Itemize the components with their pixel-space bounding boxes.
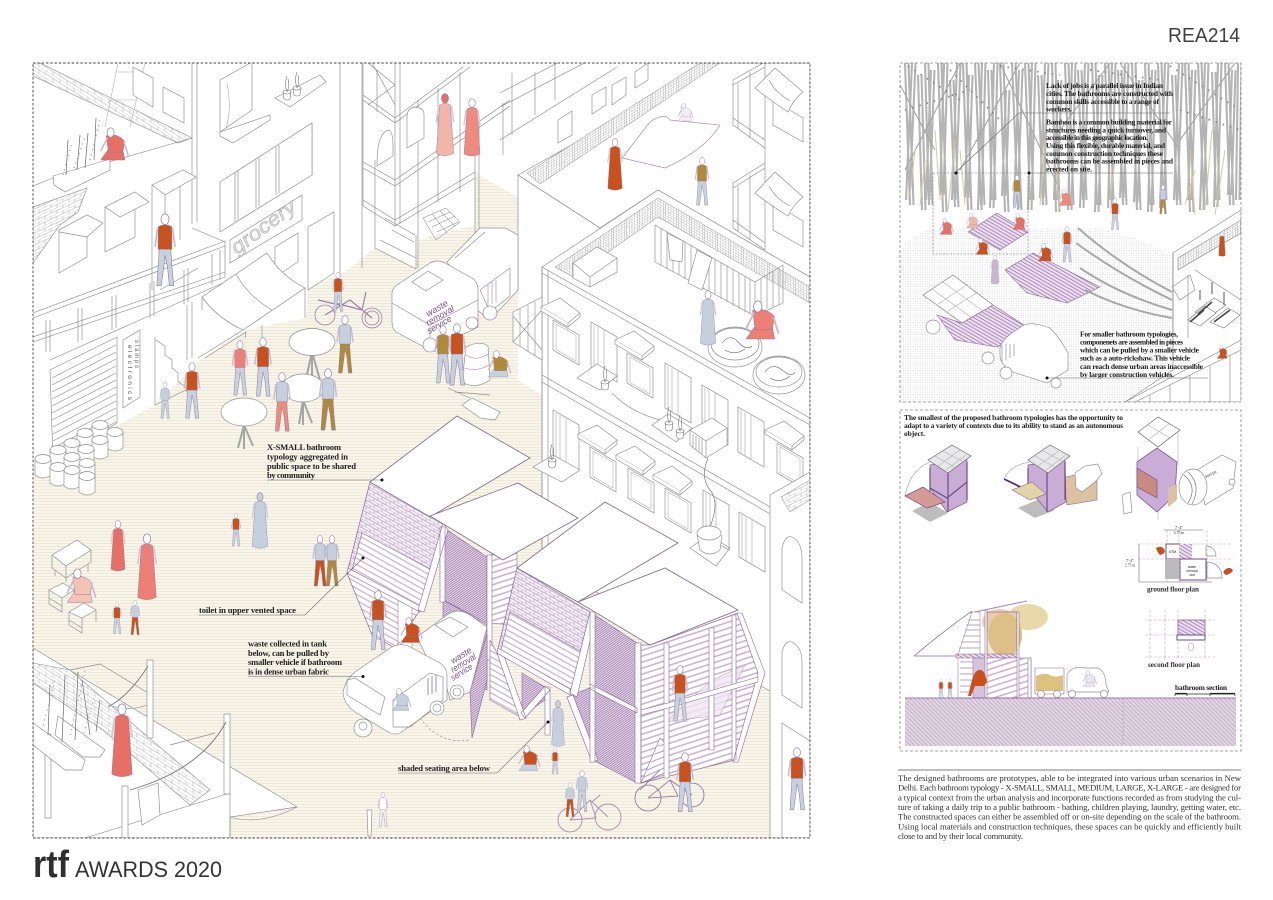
far truck bbox=[447, 228, 518, 320]
label: X-SMALL bathroom: X-SMALL bathroom bbox=[267, 442, 342, 452]
ropes bbox=[108, 666, 226, 790]
description text with top rule: close to and by their local community. bbox=[898, 831, 1023, 841]
man in orange jumper bbox=[184, 363, 200, 418]
box body bbox=[417, 611, 487, 700]
description text with top rule: a typical context from the urban analysis and incorporate functions recorded as from studying the cul- bbox=[898, 792, 1241, 802]
label: X-SMALL bathroom bbox=[267, 442, 384, 482]
description text with top rule: ture of taking a daily trip to a public bathroom - bathing, children playing, laundry, getting water, etc. bbox=[898, 802, 1241, 812]
storefront stairs bbox=[155, 337, 190, 405]
people in the street scene bbox=[67, 94, 806, 836]
man in niche bbox=[788, 748, 806, 810]
text: lack of jobs: Lack of jobs is a parallel issue in Indian bbox=[1046, 81, 1164, 90]
text: smaller typologies bbox=[1080, 330, 1204, 379]
playing children bbox=[113, 602, 121, 634]
logo: rtf awards 2020: AWARDS 2020 bbox=[75, 857, 222, 882]
woman in sari bbox=[252, 493, 268, 548]
man on motorbike bbox=[333, 272, 343, 311]
unit B lower left and seating bbox=[490, 640, 550, 735]
text: lack of jobs: workers. bbox=[1046, 105, 1072, 114]
unit A posts and struts bbox=[418, 523, 492, 660]
text: bamboo material: accessible in this geographic location. bbox=[1046, 133, 1148, 142]
unit A front face bbox=[443, 527, 487, 623]
long bamboo poles bbox=[1076, 228, 1172, 318]
woman with salmon skirt bbox=[138, 534, 156, 600]
child with grey top bbox=[160, 382, 170, 419]
dotted ground bbox=[900, 228, 1241, 402]
person climbing in toilet bbox=[672, 666, 688, 721]
children on the ground bbox=[519, 746, 540, 770]
ground floor plan bbox=[1125, 525, 1233, 594]
brick parapet bbox=[33, 63, 192, 143]
panel: bamboo assembly bbox=[900, 63, 1242, 402]
bamboo grove bbox=[900, 63, 1242, 212]
man at table bbox=[319, 369, 337, 430]
bamboo panel dashed frame bbox=[900, 63, 1241, 402]
window sills with plants bbox=[533, 364, 692, 482]
crates bbox=[423, 208, 460, 240]
man under bathroom bbox=[370, 591, 386, 650]
description text with top rule: The constructed spaces can either be assembled off or on-site depending on the scale of the bathroom. bbox=[898, 812, 1241, 822]
roof 1 bbox=[370, 416, 530, 517]
woman hanging clothes bbox=[112, 704, 132, 777]
left building with balcony and shopfront bbox=[33, 62, 375, 495]
cafe tables bbox=[221, 328, 335, 449]
leader to rickshaw bbox=[1046, 376, 1208, 380]
workers bbox=[940, 175, 1167, 284]
text: smallest typology: The smallest of the proposed bathroom typologies has the opportunity to bbox=[904, 413, 1123, 422]
windows row 1 bbox=[541, 298, 804, 488]
autonomous panel dashed frame bbox=[900, 410, 1241, 751]
text: smaller typologies: such as a auto-rickshaw. This vehicle bbox=[1080, 354, 1191, 362]
stacked planters bbox=[1188, 298, 1240, 328]
roof 2 bbox=[430, 483, 578, 560]
detail inset frame bbox=[933, 172, 1173, 254]
label: shaded seating area below: shaded seating area below bbox=[398, 763, 491, 773]
logo: rtf awards 2020 bbox=[33, 844, 222, 886]
unit B front faces bbox=[567, 612, 641, 783]
label: toilet in upper vented space bbox=[199, 556, 364, 615]
ground floor plan: 7'-4" bbox=[1175, 525, 1183, 530]
motorcycle bbox=[315, 292, 382, 328]
barrels bbox=[35, 420, 123, 495]
text: bamboo material: Using this flexible, durable material, and bbox=[1046, 141, 1166, 150]
rope ladder bbox=[105, 63, 145, 127]
ground floor plan: 7'-4" bbox=[1126, 558, 1134, 563]
electronics sign bbox=[123, 330, 140, 408]
second floor plan: second floor plan bbox=[1148, 661, 1200, 669]
street ground bbox=[33, 173, 770, 838]
roof 4 bbox=[578, 568, 738, 645]
text: lack of jobs bbox=[1046, 81, 1174, 114]
solar panel trailer and rickshaw bbox=[923, 275, 1068, 388]
text: lack of jobs: common skills accessible to a range of bbox=[1046, 97, 1160, 106]
project code REA214: REA214 bbox=[1168, 24, 1240, 47]
man with backpack bbox=[255, 338, 271, 396]
text: bamboo material: Bamboo is a common building material for bbox=[1046, 118, 1173, 126]
ground floor plan: 2.75 m bbox=[1125, 564, 1135, 568]
text: smallest typology bbox=[904, 413, 1123, 438]
seated person in orange bbox=[401, 618, 422, 642]
two women on upper balcony bbox=[436, 94, 454, 156]
label: shaded seating area below bbox=[398, 720, 550, 773]
tan saplings bbox=[910, 130, 1225, 215]
rooftop table bbox=[573, 247, 617, 287]
text: smaller typologies: componenets are assembled in pieces bbox=[1080, 338, 1183, 346]
main panel dashed frame bbox=[33, 63, 810, 838]
door behind awning bbox=[275, 212, 334, 290]
air conditioner with hose and pot bbox=[690, 418, 730, 566]
electronics sign: stamps bbox=[133, 340, 139, 368]
bamboo panels bbox=[968, 213, 1100, 303]
truck docked at unit A: service bbox=[449, 661, 474, 683]
planter box and plants bbox=[53, 118, 110, 192]
upper windows bbox=[133, 62, 326, 143]
small upper windows bbox=[558, 63, 648, 143]
label: waste collected in tank: is in dense urban fabric bbox=[248, 666, 329, 676]
windows with ledges bbox=[59, 170, 196, 290]
child holding hand bbox=[231, 513, 241, 546]
waste removal truck in street bbox=[392, 261, 478, 352]
man on balcony bbox=[155, 214, 175, 286]
isometric 3 with tanker bbox=[1122, 417, 1236, 520]
text: bamboo material: bathrooms can be assembled in pieces and bbox=[1046, 157, 1174, 166]
hanging cloth bbox=[138, 783, 160, 825]
ground section hatch bbox=[905, 698, 1236, 746]
windows row 2 bbox=[553, 410, 765, 572]
truck docked at unit A: removal bbox=[449, 651, 479, 675]
bathroom section drawing bbox=[914, 601, 1109, 698]
wash basins bbox=[708, 327, 805, 394]
cart with sand bbox=[1035, 668, 1064, 694]
plants bbox=[48, 672, 100, 742]
label: waste collected in tank: smaller vehicle if bathroom bbox=[248, 657, 343, 667]
isometric 2 with rickshaw bbox=[1004, 445, 1102, 518]
description text with top rule: Delhi. Each bathroom typology - X-SMALL, SMALL, MEDIUM, LARGE, X-LARGE - are designed for bbox=[898, 783, 1241, 793]
auto rickshaw bbox=[343, 645, 447, 734]
woman in orange holding sheet bbox=[608, 139, 622, 190]
crouching person by bin bbox=[488, 351, 511, 377]
truck lettering: waste bbox=[424, 298, 450, 319]
roller shutter bbox=[50, 337, 117, 460]
unit B right face bbox=[641, 613, 765, 783]
stools and table in left courtyard bbox=[49, 540, 96, 633]
waste removal truck in street: removal bbox=[424, 303, 457, 328]
bathroom cluster bbox=[343, 416, 765, 783]
arched window bbox=[377, 130, 393, 166]
child passenger bbox=[565, 782, 575, 817]
label: toilet in upper vented space: toilet in upper vented space bbox=[199, 605, 296, 615]
label: waste collected in tank: waste collected in tank bbox=[248, 638, 327, 648]
central apartment block bbox=[513, 190, 810, 700]
unit B upper left face bbox=[497, 568, 590, 695]
truck docked at unit A bbox=[343, 611, 487, 741]
woman sitting on ledge bbox=[101, 128, 128, 160]
label: waste collected in tank: below, can be pulled by bbox=[248, 648, 330, 658]
posts bbox=[45, 660, 230, 838]
grocery sign: grocery bbox=[227, 195, 302, 259]
panel: main isometric street scene bbox=[33, 60, 810, 838]
awning bbox=[198, 253, 305, 358]
electronics sign: electronics bbox=[126, 345, 133, 401]
text: smallest typology: object. bbox=[904, 429, 925, 438]
label: waste collected in tank bbox=[248, 638, 364, 678]
ground floor plan: removal bbox=[1186, 569, 1198, 573]
isometric 1 bbox=[905, 445, 971, 522]
box lettering: waste bbox=[449, 645, 474, 666]
woman in grey sari under bathroom bbox=[552, 701, 564, 746]
auto rickshaw side view bbox=[1067, 667, 1109, 692]
ground floor plan: 2.75 m bbox=[1174, 531, 1184, 535]
label: X-SMALL bathroom: public space to be shared bbox=[267, 461, 356, 471]
lower brick wall bbox=[33, 188, 87, 263]
second floor plan bbox=[1145, 610, 1215, 669]
right arched building bbox=[770, 472, 810, 838]
description text with top rule bbox=[898, 770, 1242, 841]
unit A lower faces bbox=[347, 573, 487, 690]
waste removal truck in street: service bbox=[425, 314, 453, 336]
text: bamboo material bbox=[1046, 118, 1174, 174]
far right windows and awnings bbox=[733, 62, 803, 250]
label: bathroom section with scale bar: bathroom section bbox=[1175, 683, 1228, 692]
couple bbox=[313, 536, 327, 586]
woman with pink scarf bbox=[232, 341, 248, 395]
ground floor plan: ground floor plan bbox=[1147, 586, 1199, 594]
balcony lattice on left bbox=[513, 297, 542, 360]
upper roof and parapet bbox=[518, 62, 810, 290]
woman washing bbox=[746, 301, 779, 339]
bedsheet bbox=[622, 116, 720, 168]
roof 3 bbox=[517, 502, 678, 602]
men at waste bin bbox=[435, 326, 451, 383]
woman in grey and salmon bbox=[274, 373, 290, 431]
dashed swing arc bbox=[420, 718, 470, 741]
ground floor plan: waste bbox=[1188, 565, 1196, 569]
unit A upper left face bbox=[347, 482, 443, 612]
rickshaw driver bbox=[392, 689, 411, 710]
rubbish bin and debris bbox=[448, 343, 500, 420]
text: smaller typologies: For smaller bathroom typologies, bbox=[1080, 330, 1178, 338]
child on roof bbox=[695, 158, 709, 205]
label: bathroom section with scale bar bbox=[1175, 683, 1235, 696]
girl on stool bbox=[67, 569, 96, 602]
small window bbox=[407, 107, 424, 148]
text: smaller typologies: by larger construction vehicles. bbox=[1080, 370, 1174, 379]
cyclist bbox=[576, 771, 588, 812]
man with bicycle bbox=[677, 753, 693, 812]
man with grey kurta bbox=[337, 316, 353, 373]
ground floor plan: cart bbox=[1189, 573, 1195, 577]
corner building bbox=[1125, 210, 1241, 402]
description text with top rule: The designed bathrooms are prototypes, able to be integrated into various urban scenarios in New bbox=[898, 773, 1242, 783]
tanker bbox=[1197, 455, 1236, 505]
bicycle by stair bbox=[635, 770, 704, 811]
description text with top rule: Using local materials and construction techniques, these spaces can be quickly and efficiently built bbox=[898, 821, 1242, 831]
stair bbox=[641, 738, 667, 783]
seated mother with child bbox=[111, 521, 125, 571]
planters bbox=[33, 723, 85, 770]
logo: rtf awards 2020: rtf bbox=[33, 844, 69, 886]
shop windows bbox=[220, 123, 312, 232]
woman behind sheet bbox=[678, 103, 693, 121]
lower left building with clothes lines bbox=[33, 648, 297, 838]
label: X-SMALL bathroom: by community bbox=[267, 470, 316, 480]
woman with bucket bbox=[700, 291, 716, 345]
balcony with railing bbox=[33, 228, 225, 360]
ground floor plan: ATM bbox=[1169, 550, 1176, 554]
balustrade bbox=[1125, 340, 1241, 402]
upper right balcony building bbox=[363, 60, 617, 269]
text: smallest typology: adapt to a variety of contexts due to its ability to stand as an autonomous bbox=[904, 421, 1123, 430]
text: smaller typologies: can reach dense urban areas inaccessible bbox=[1080, 362, 1204, 371]
panel: autonomous object diagrams bbox=[904, 413, 1236, 746]
washing rack bbox=[655, 225, 783, 316]
text: smaller typologies: which can be pulled by a smaller vehicle bbox=[1080, 346, 1200, 354]
text: bamboo material: structures needing a quick turnover, and bbox=[1046, 125, 1167, 134]
hinged wall panel bbox=[470, 634, 487, 738]
text: lack of jobs: cities. The bathrooms are constructed with bbox=[1046, 89, 1174, 98]
unit A side face bbox=[487, 540, 517, 625]
label: X-SMALL bathroom: typology aggregated in bbox=[267, 452, 348, 462]
isometric 3 with tanker: WATER bbox=[1205, 470, 1218, 479]
bicycle with riders bbox=[558, 795, 621, 832]
text: bamboo material: common construction techniques these bbox=[1046, 149, 1164, 158]
child with skateboard bbox=[367, 792, 388, 836]
stairs under balcony bbox=[375, 210, 418, 269]
text: bamboo material: erected on site. bbox=[1046, 164, 1092, 174]
